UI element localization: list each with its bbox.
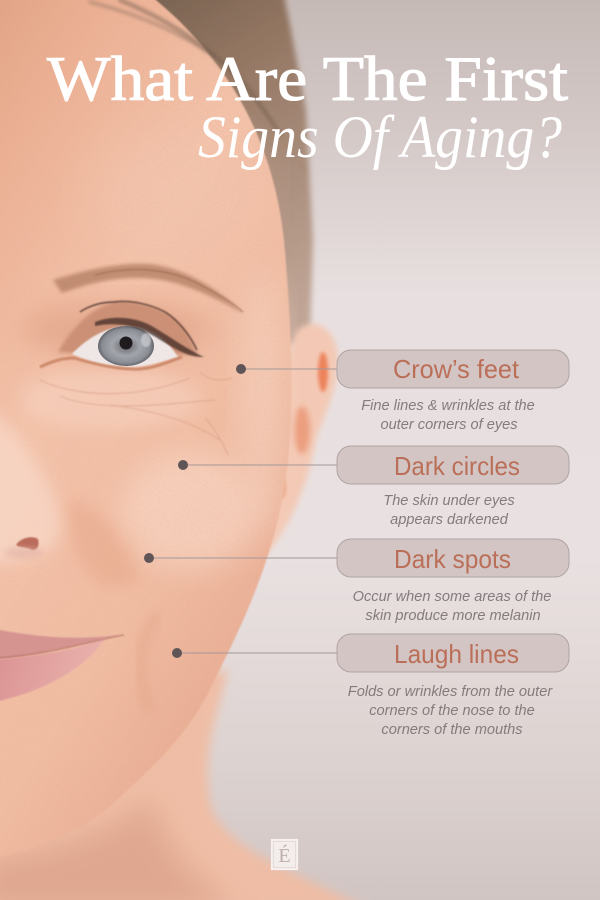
pupil [120, 336, 132, 350]
label text: Dark circles [394, 451, 520, 481]
nostril [16, 537, 39, 550]
label text: Crow’s feet [393, 354, 520, 384]
description: skin produce more melanin [365, 608, 541, 624]
lower lid [40, 357, 182, 369]
face [0, 0, 292, 860]
neck shadow [0, 800, 240, 900]
lips [0, 628, 125, 703]
forehead highlight [95, 130, 245, 250]
title line 1: What Are The First [47, 44, 569, 114]
label pill [337, 446, 569, 484]
marker dot [178, 460, 188, 470]
cheek highlight [120, 450, 260, 570]
ear [265, 324, 338, 555]
callout: crow's feet [236, 350, 569, 433]
lid crease [80, 301, 197, 350]
leader line [177, 652, 337, 654]
logo letter: É [278, 844, 291, 867]
marker dot [236, 364, 246, 374]
nose [0, 400, 61, 564]
callout: dark circles [178, 446, 569, 528]
under-eye wrinkles [40, 372, 232, 455]
leader line [183, 464, 337, 466]
title line 2: Signs Of Aging? [198, 104, 562, 170]
upper lashes [95, 318, 204, 357]
eyebrow hairs [95, 270, 243, 312]
photo: portrait of a woman's face [0, 0, 370, 900]
leader line [241, 368, 337, 370]
eye white [72, 326, 178, 367]
leader line [149, 557, 337, 559]
ear lobe shadow [276, 477, 286, 499]
lip line [0, 635, 124, 658]
eyebrow body [53, 264, 244, 314]
marker dot [144, 553, 154, 563]
iris glint [141, 333, 151, 347]
label text: Dark spots [394, 544, 511, 574]
side of face light area [240, 270, 284, 530]
lower lip [0, 637, 106, 703]
title [47, 44, 569, 170]
description: outer corners of eyes [380, 417, 518, 433]
lower ear shadow [294, 406, 310, 454]
skin texture [0, 0, 300, 860]
cheek shadow beside the nose [66, 500, 140, 587]
eyelid [58, 302, 198, 355]
logo [272, 840, 298, 870]
logo inner frame [274, 842, 296, 868]
hair strands [90, 0, 305, 170]
callout: laugh lines [172, 634, 569, 738]
iris [98, 326, 154, 366]
under-eye skin [20, 370, 200, 430]
eye [40, 301, 204, 369]
neck and shoulder [0, 670, 370, 900]
eye socket shadow [23, 302, 213, 358]
upper lip [0, 628, 125, 660]
hair [80, 0, 313, 345]
label pill [337, 350, 569, 388]
nostril shadow [4, 547, 44, 559]
description: The skin under eyes [383, 493, 515, 509]
eyebrow [53, 264, 244, 314]
label pill [337, 634, 569, 672]
description: appears darkened [390, 512, 509, 528]
description: corners of the nose to the [369, 703, 535, 719]
description: corners of the mouths [381, 722, 523, 738]
marker dot [172, 648, 182, 658]
description: Folds or wrinkles from the outer [348, 684, 553, 700]
description: Fine lines & wrinkles at the [361, 398, 535, 414]
label pill [337, 539, 569, 577]
inner ear [318, 352, 328, 392]
logo frame [272, 840, 298, 870]
callout: dark spots [144, 539, 569, 624]
label text: Laugh lines [394, 639, 519, 669]
description: Occur when some areas of the [353, 589, 551, 605]
smile fold [141, 615, 158, 712]
